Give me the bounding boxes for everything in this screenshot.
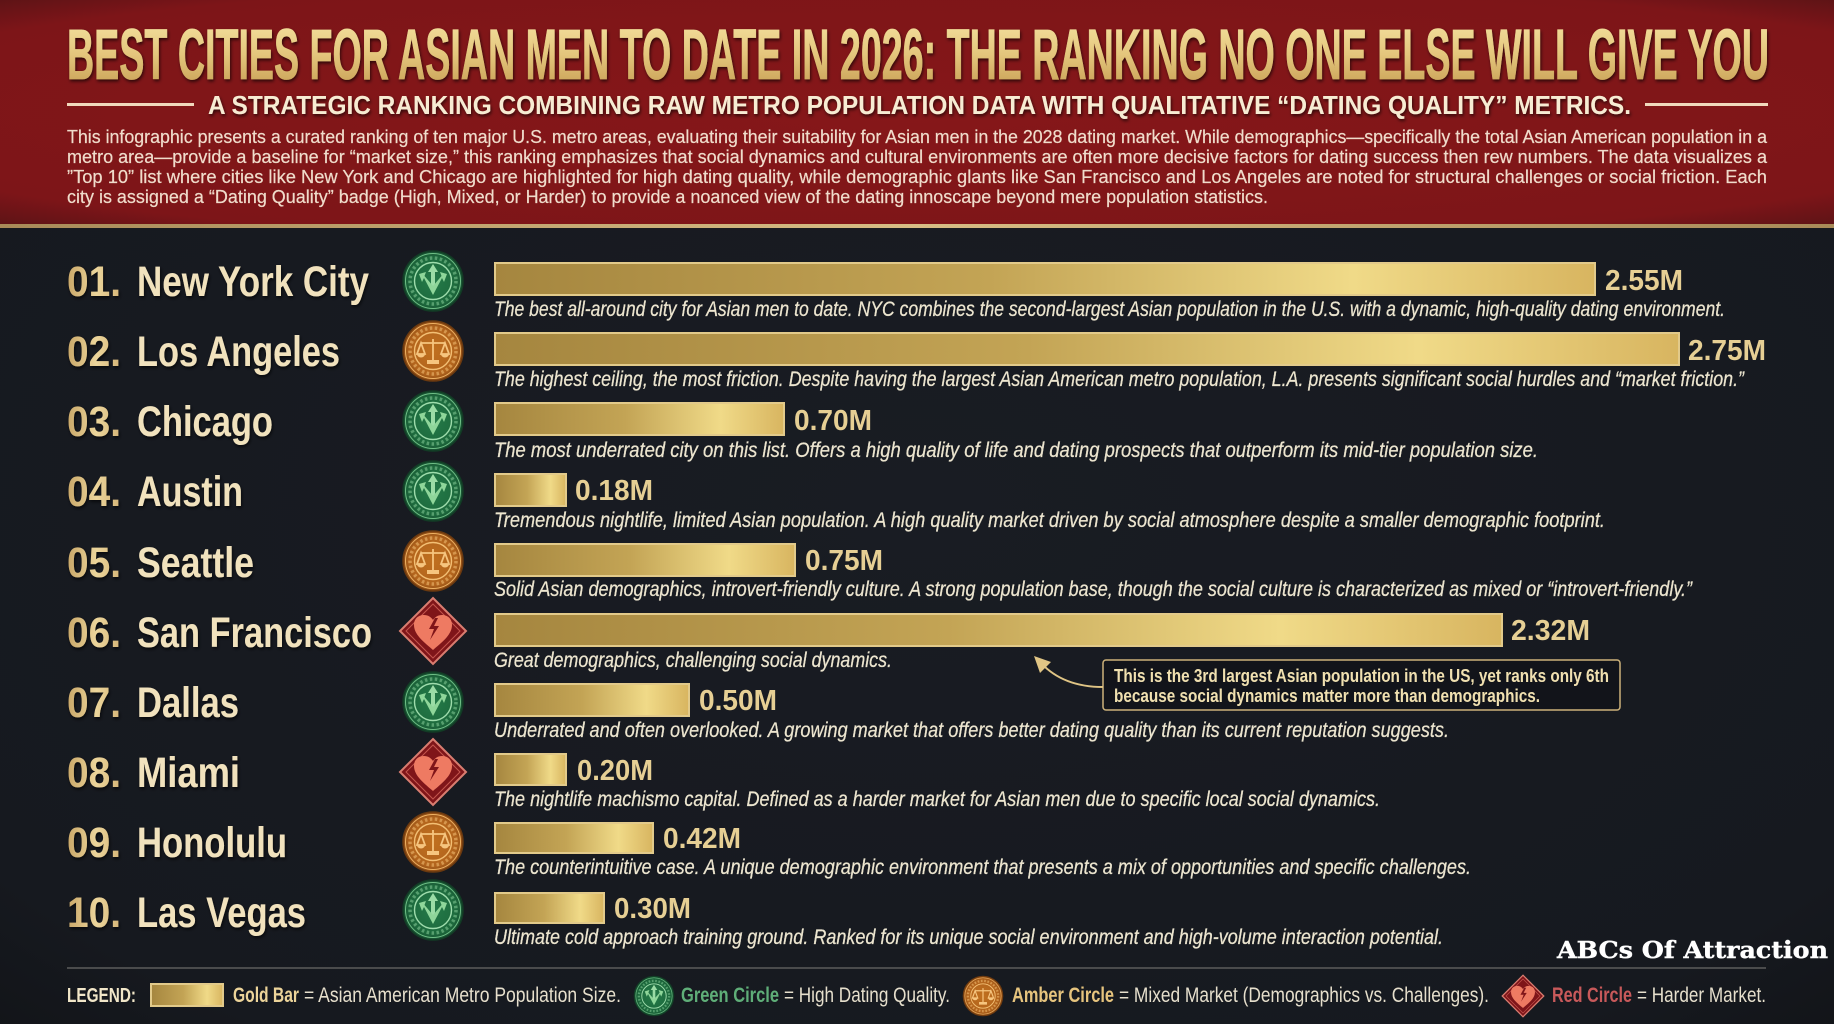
row 02: Los Angeles [67,321,1766,391]
arrow: callout to bar [1034,656,1103,687]
row 04: Austin: 04. [67,468,121,516]
row 06: San Francisco: San Francisco [137,609,372,657]
row 01: New York City: 2.55M [1605,265,1683,297]
legend: = Asian American Metro Population Size. [304,984,621,1007]
row 09: Honolulu [67,812,1471,879]
row 05: Seattle [67,531,1693,601]
row 07: Dallas [67,672,1449,742]
intro paragraph: ”Top 10” list where cities like New York and Chicago are highlighted for high dating quality, while demographic glants like San Francisco and Los Angeles are noted for structural challenges or social friction. Each [67,166,1767,187]
row 08: Miami [67,739,1380,811]
legend: Red Circle [1552,984,1632,1007]
row 03: Chicago: The most underrated city on this list. Offers a high quality of life and dating prospects that outperform its mid-tier population size. [494,439,1538,462]
row 07: Dallas: Underrated and often overlooked. A growing market that offers better dating quality than its current reputation suggests. [494,719,1449,742]
row 07: Dallas: 07. [67,679,121,727]
intro paragraph: This infographic presents a curated ranking of ten major U.S. metro areas, evaluating their suitability for Asian men in the 2028 dating market. While demographics—specifically the total Asian American population in a [67,126,1768,147]
row 03: Chicago [67,391,1538,462]
row 06: San Francisco: 2.32M [1511,615,1590,647]
row 10: Las Vegas [67,880,1443,949]
legend: Amber Circle [1012,984,1114,1007]
row 03: Chicago: 0.70M [794,405,872,437]
intro paragraph [67,126,1768,207]
row 03: Chicago: Chicago [137,398,273,446]
row 08: Miami: 08. [67,749,121,797]
row 01: New York City: 01. [67,258,121,306]
row 06: San Francisco [67,598,1590,672]
legend: red badge [1502,975,1544,1017]
row 06: San Francisco: Great demographics, challenging social dynamics. [494,649,892,672]
row 05: Seattle: Seattle [137,539,254,587]
callout: San Francisco note: This is the 3rd largest Asian population in the US, yet ranks only 6th [1114,666,1609,686]
row 09: Honolulu: 0.42M [663,823,741,855]
legend [67,967,1766,1017]
header panel [0,0,1834,228]
row 09: Honolulu: Honolulu [137,819,287,867]
row 03: Chicago: 03. [67,398,121,446]
callout: San Francisco note [1103,660,1620,710]
legend: = High Dating Quality. [784,984,950,1007]
legend: green badge [634,976,674,1016]
intro paragraph: metro area—provide a baseline for “market size,” this ranking emphasizes that social dynamics and cultural environments are often more decisive factors for dating success then rew numbers. The data visualizes a [67,146,1768,167]
row 04: Austin: Austin [137,468,243,516]
row 04: Austin: Tremendous nightlife, limited Asian population. A high quality market driven by social atmosphere despite a smaller demographic footprint. [494,509,1605,532]
row 07: Dallas: Dallas [137,679,239,727]
legend: Green Circle [681,984,779,1007]
row 08: Miami: The nightlife machismo capital. Defined as a harder market for Asian men due to specific local social dynamics. [494,788,1380,811]
callout: San Francisco note: because social dynamics matter more than demographics. [1114,686,1540,706]
row 05: Seattle: 0.75M [805,545,883,577]
legend: = Harder Market. [1637,984,1766,1007]
row 04: Austin [67,461,1605,532]
legend: LEGEND: [67,985,136,1007]
row 09: Honolulu: The counterintuitive case. A unique demographic environment that presents a mix of opportunities and specific challenges. [494,856,1471,879]
row 10: Las Vegas: Ultimate cold approach training ground. Ranked for its unique social environment and high-volume interaction potential. [494,926,1443,949]
row 01: New York City: New York City [137,258,369,306]
legend: gold bar [151,984,223,1006]
row 02: Los Angeles: 2.75M [1688,335,1766,367]
row 06: San Francisco: 06. [67,609,121,657]
row 10: Las Vegas: Las Vegas [137,889,306,937]
row 10: Las Vegas: 0.30M [614,893,691,925]
row 08: Miami: Miami [137,749,240,797]
row 09: Honolulu: 09. [67,819,121,867]
row 08: Miami: 0.20M [577,755,653,787]
watermark: ABCs Of Attraction [1556,937,1828,964]
row 04: Austin: 0.18M [575,475,653,507]
legend: = Mixed Market (Demographics vs. Challenges). [1119,984,1489,1007]
subtitle: A STRATEGIC RANKING COMBINING RAW METRO POPULATION DATA WITH QUALITATIVE “DATING QUALITY” METRICS. [208,90,1631,120]
row 01: New York City [67,251,1725,321]
legend: amber badge [963,976,1003,1016]
row 02: Los Angeles: Los Angeles [137,328,340,376]
row 05: Seattle: 05. [67,539,121,587]
row 10: Las Vegas: 10. [67,889,121,937]
legend: Gold Bar [233,984,299,1007]
row 02: Los Angeles: 02. [67,328,121,376]
intro paragraph: city is assigned a “Dating Quality” badge (High, Mixed, or Harder) to provide a noanced view of the dating innoscape beyond mere population statistics. [67,186,1268,207]
row 07: Dallas: 0.50M [699,685,777,717]
